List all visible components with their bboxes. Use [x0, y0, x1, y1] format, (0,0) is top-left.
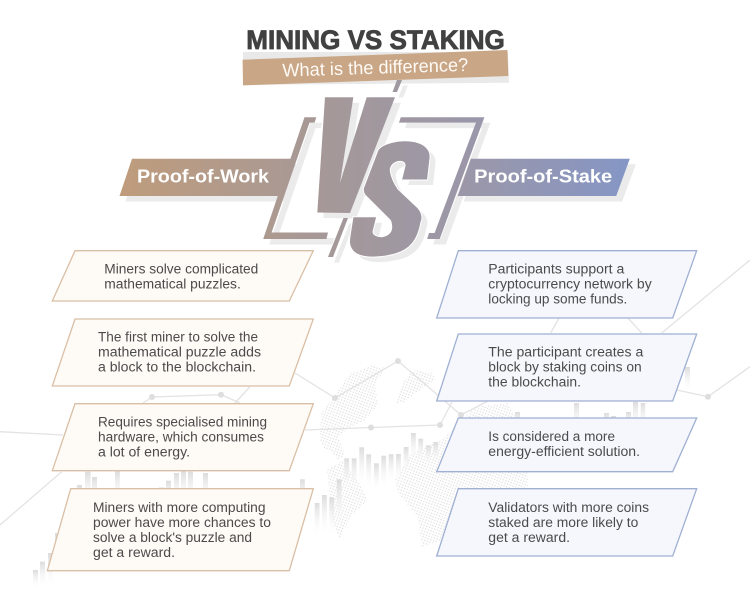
Proof-of-Stake label: Proof-of-Stake	[474, 166, 612, 186]
background: fading bar chart	[33, 367, 690, 589]
panel: proof-of-work point 4: solve a block's puzzle and	[93, 530, 252, 545]
VS emblem with Proof-of-Work and Proof-of-Stake banners	[120, 80, 630, 257]
panel: proof-of-work point 4: Miners with more computing	[93, 500, 266, 515]
subtitle banner: What is the difference?	[282, 54, 469, 81]
panel: proof-of-work point 1	[52, 251, 313, 301]
panel: proof-of-stake point 2: The participant creates a	[488, 345, 644, 360]
panel: proof-of-work point 2: mathematical puzzle adds	[98, 345, 261, 360]
panel: proof-of-work point 2	[52, 319, 313, 386]
panel: proof-of-stake point 1: locking up some funds.	[488, 292, 627, 306]
panel: proof-of-stake point 3: energy-efficient solution.	[488, 444, 640, 459]
panel: proof-of-work point 2: a block to the blockchain.	[98, 360, 256, 375]
panel: proof-of-work point 1: Miners solve complicated	[104, 262, 258, 276]
panel: proof-of-work point 3: Requires specialised mining	[98, 415, 267, 430]
background: dotted world map	[320, 365, 528, 547]
panel: proof-of-stake point 4	[437, 489, 697, 556]
panel: proof-of-stake point 1: cryptocurrency network by	[488, 276, 652, 292]
panel: proof-of-stake point 2: the blockchain.	[488, 375, 581, 390]
panel: proof-of-stake point 3: Is considered a more	[488, 429, 615, 444]
panel: proof-of-work point 4: get a reward.	[93, 545, 175, 560]
title: MINING VS STAKING	[246, 25, 505, 55]
panel: proof-of-work point 4: power have more chances to	[93, 515, 271, 530]
panel: proof-of-stake point 4: Validators with more coins	[488, 500, 649, 515]
panel: proof-of-stake point 1	[437, 251, 697, 318]
panel: proof-of-work point 4	[47, 489, 313, 571]
panel: proof-of-stake point 2	[437, 334, 697, 401]
background: network lines and nodes	[0, 260, 750, 525]
panel: proof-of-stake point 3	[437, 418, 697, 472]
panel: proof-of-stake point 1: Participants support a	[488, 262, 625, 276]
panel: proof-of-stake point 4: staked are more likely to	[488, 515, 638, 530]
subtitle banner	[243, 50, 509, 85]
panel: proof-of-work point 3	[52, 404, 313, 471]
VS graphic shadow	[126, 86, 636, 263]
panel: proof-of-work point 2: The first miner to solve the	[98, 330, 258, 345]
panel: proof-of-stake point 4: get a reward.	[488, 530, 570, 545]
panel: proof-of-stake point 2: block by staking coins on	[488, 360, 642, 375]
panel: proof-of-work point 3: a lot of energy.	[98, 445, 190, 460]
Proof-of-Work label: Proof-of-Work	[137, 166, 270, 186]
panel: proof-of-work point 3: hardware, which consumes	[98, 430, 264, 445]
panel: proof-of-work point 1: mathematical puzzles.	[104, 276, 241, 292]
